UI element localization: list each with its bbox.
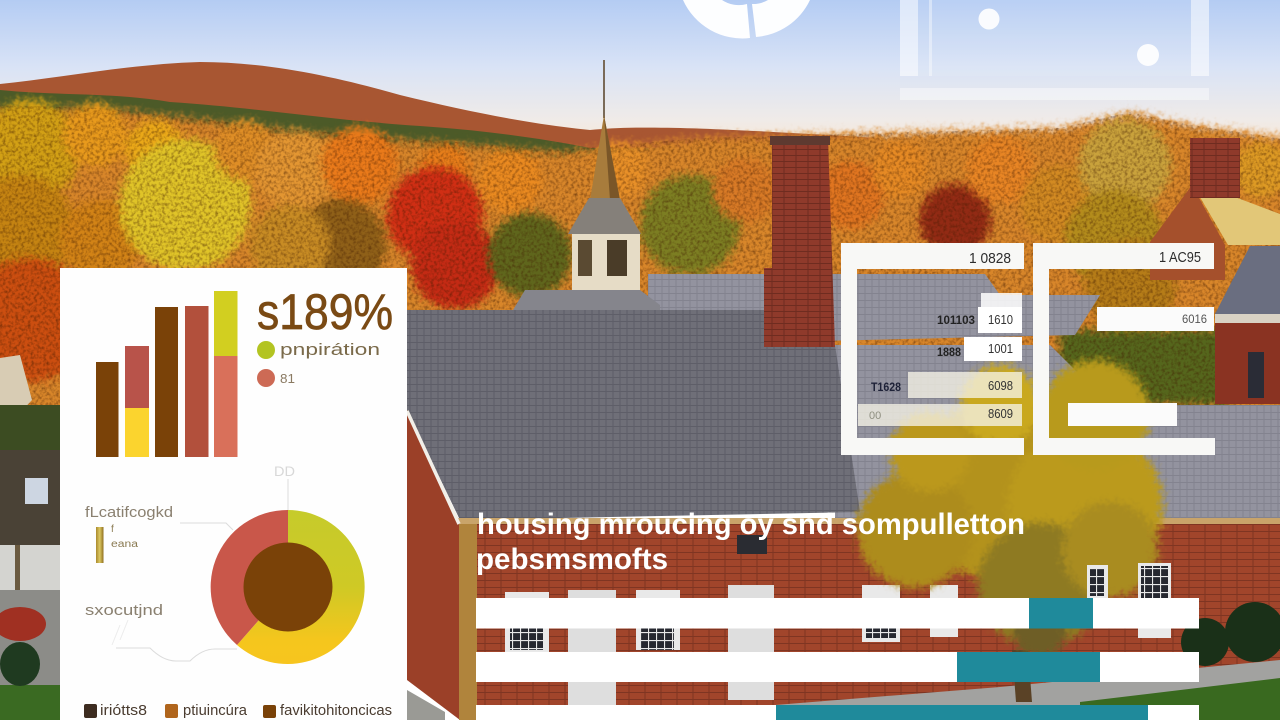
blank row — [1068, 403, 1177, 426]
donut callout: upper label: f — [111, 524, 114, 535]
panel: left charts — [60, 268, 407, 720]
donut callout: upper label — [85, 504, 233, 563]
headline figure: s189% — [257, 284, 393, 340]
row value — [1097, 307, 1214, 331]
back roof — [648, 274, 1100, 345]
legend row: ptiuincúra — [183, 702, 248, 719]
brick front wall — [460, 522, 1280, 720]
autumn tree line — [0, 100, 1280, 430]
progress bar 2 — [476, 652, 1199, 682]
progress bars — [476, 598, 1199, 720]
corner board — [459, 524, 477, 720]
chimney — [764, 136, 835, 347]
donut callout: upper label: eana — [111, 539, 139, 550]
table two frame — [1033, 243, 1215, 455]
row 4: 8609 — [988, 406, 1013, 421]
right wing windows — [1087, 563, 1171, 638]
row 3: 6098 — [988, 378, 1013, 393]
legend row: favikitohitoncicas — [280, 702, 392, 719]
shrubs — [1181, 602, 1280, 666]
panel: table one — [841, 243, 1024, 455]
bar chart — [96, 291, 238, 457]
sky — [0, 0, 1280, 150]
row 1: 1610 — [988, 312, 1013, 327]
heading: housing mroucing oy snd sompulletton — [477, 508, 1025, 541]
donut chart — [211, 510, 365, 664]
row 3 — [871, 372, 1022, 398]
legend row: iriótts8 — [100, 702, 147, 719]
table one frame — [841, 243, 1024, 455]
heading — [476, 508, 1025, 576]
legend item: population: pnpirátion — [280, 340, 380, 359]
legend row — [84, 702, 392, 719]
donut callout: lower label: sxocutjnd — [85, 602, 163, 619]
progress bar 3 — [476, 705, 1199, 720]
donut top label: DD — [274, 463, 295, 479]
row 4: 00 — [869, 410, 881, 422]
ground by side wall — [407, 690, 445, 720]
progress bar 1 — [476, 598, 1199, 628]
row 4 — [858, 404, 1022, 426]
far right building — [1150, 138, 1280, 404]
row 2: 1888 — [937, 345, 961, 359]
table two header value: 1 AC95 — [1159, 249, 1201, 266]
table one header value: 1 0828 — [969, 250, 1011, 267]
main slate roof — [407, 310, 860, 520]
yellow foreground tree — [857, 360, 1163, 702]
path and lawn — [0, 660, 1280, 720]
donut callout: upper label: fLcatifcogkd — [85, 504, 173, 521]
row 1 — [937, 293, 1022, 333]
row value: 6016 — [1182, 312, 1207, 326]
side wall trim — [407, 411, 459, 524]
legend item: 81 — [257, 369, 295, 387]
row 2 — [937, 337, 1022, 361]
right roof slope — [835, 345, 1280, 530]
faded chart: donut in the sky — [683, 0, 810, 38]
church steeple — [513, 60, 660, 310]
donut callout: lower label — [85, 602, 237, 661]
donut top label — [274, 463, 295, 510]
panel: table two — [1033, 243, 1215, 455]
windows and doors — [505, 535, 958, 705]
legend item: population — [257, 340, 380, 359]
side wall — [407, 412, 460, 720]
legend item: 81: 81 — [280, 371, 295, 386]
row 2: 1001 — [988, 341, 1013, 356]
left village buildings — [0, 355, 60, 686]
faded panel in the sky — [900, 0, 1209, 100]
row 1: 101103 — [937, 313, 975, 327]
hill — [0, 62, 880, 180]
eaves — [458, 518, 1280, 524]
heading: pebsmsmofts — [476, 543, 668, 576]
row 3: T1628 — [871, 380, 901, 394]
